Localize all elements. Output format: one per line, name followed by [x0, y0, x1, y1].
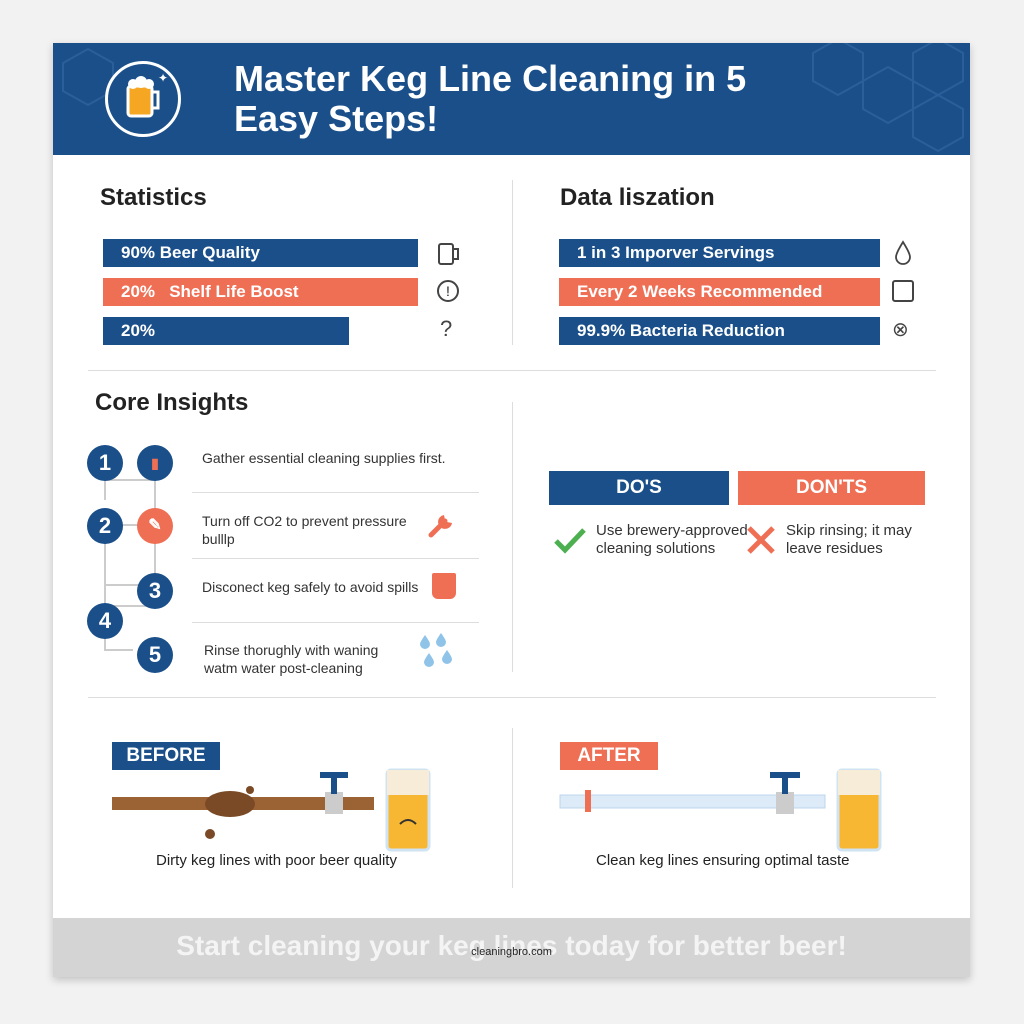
panel: core insights: 3 — [149, 578, 161, 603]
panel: after — [560, 742, 882, 869]
panel: statistics: 20% Shelf Life Boost — [121, 282, 299, 301]
panel: statistics — [100, 184, 459, 345]
panel: dos and donts: cleaning solutions — [596, 540, 715, 557]
panel: statistics: ? — [440, 316, 452, 341]
panel: before — [112, 742, 430, 869]
panel: after: AFTER — [577, 745, 641, 766]
panel: core insights: ▮ — [151, 455, 159, 471]
footer: cleaningbro.com — [471, 946, 552, 958]
panel: dos and donts: Skip rinsing; it may — [786, 522, 912, 539]
panel: core insights: watm water post-cleaning — [204, 660, 363, 676]
panel: core insights: Core Insights — [95, 389, 248, 416]
panel: data lization: Every 2 Weeks Recommended — [577, 282, 822, 301]
title: Easy Steps! — [234, 98, 438, 139]
panel: dos and donts: DON'TS — [796, 477, 867, 498]
panel: data lization: 1 in 3 Imporver Servings — [577, 243, 774, 262]
panel: statistics: ! — [446, 283, 450, 299]
panel: data lization: Data liszation — [560, 184, 715, 211]
panel: core insights: Gather essential cleaning supplies first. — [202, 450, 446, 466]
panel: core insights: 2 — [99, 513, 111, 538]
panel: core insights: 1 — [99, 450, 111, 475]
icon: beer mug — [105, 61, 181, 137]
panel: statistics: Statistics — [100, 184, 207, 211]
panel: before: Dirty keg lines with poor beer quality — [156, 852, 397, 869]
panel: data lization: ⊗ — [892, 319, 909, 341]
icon: beer mug: ✦ — [158, 71, 168, 85]
panel: dos and donts: Use brewery-approved — [596, 522, 748, 539]
panel: core insights: bulllp — [202, 531, 235, 547]
panel: core insights: Rinse thorughly with waning — [204, 642, 378, 658]
panel: core insights: Disconect keg safely to avoid spills — [202, 579, 418, 595]
panel: dos and donts — [549, 471, 925, 557]
panel: core insights: ✎ — [148, 517, 162, 534]
panel: after: Clean keg lines ensuring optimal taste — [596, 852, 849, 869]
panel: statistics: 20% — [121, 321, 155, 340]
panel: data lization — [559, 184, 914, 345]
title — [234, 58, 746, 139]
panel: dos and donts: DO'S — [616, 477, 662, 498]
panel: core insights: Turn off CO2 to prevent pressure — [202, 513, 407, 529]
panel: data lization: 99.9% Bacteria Reduction — [577, 321, 785, 340]
title: Master Keg Line Cleaning in 5 — [234, 58, 746, 99]
panel: dos and donts: leave residues — [786, 540, 883, 557]
footer: Start cleaning your keg lines today for better beer! — [176, 930, 847, 961]
header — [53, 43, 970, 155]
panel: core insights: 4 — [99, 608, 111, 633]
panel: before: BEFORE — [126, 745, 206, 766]
panel: statistics: 90% Beer Quality — [121, 243, 260, 262]
panel: core insights — [87, 389, 479, 676]
footer — [53, 918, 970, 977]
panel: core insights: 5 — [149, 642, 161, 667]
